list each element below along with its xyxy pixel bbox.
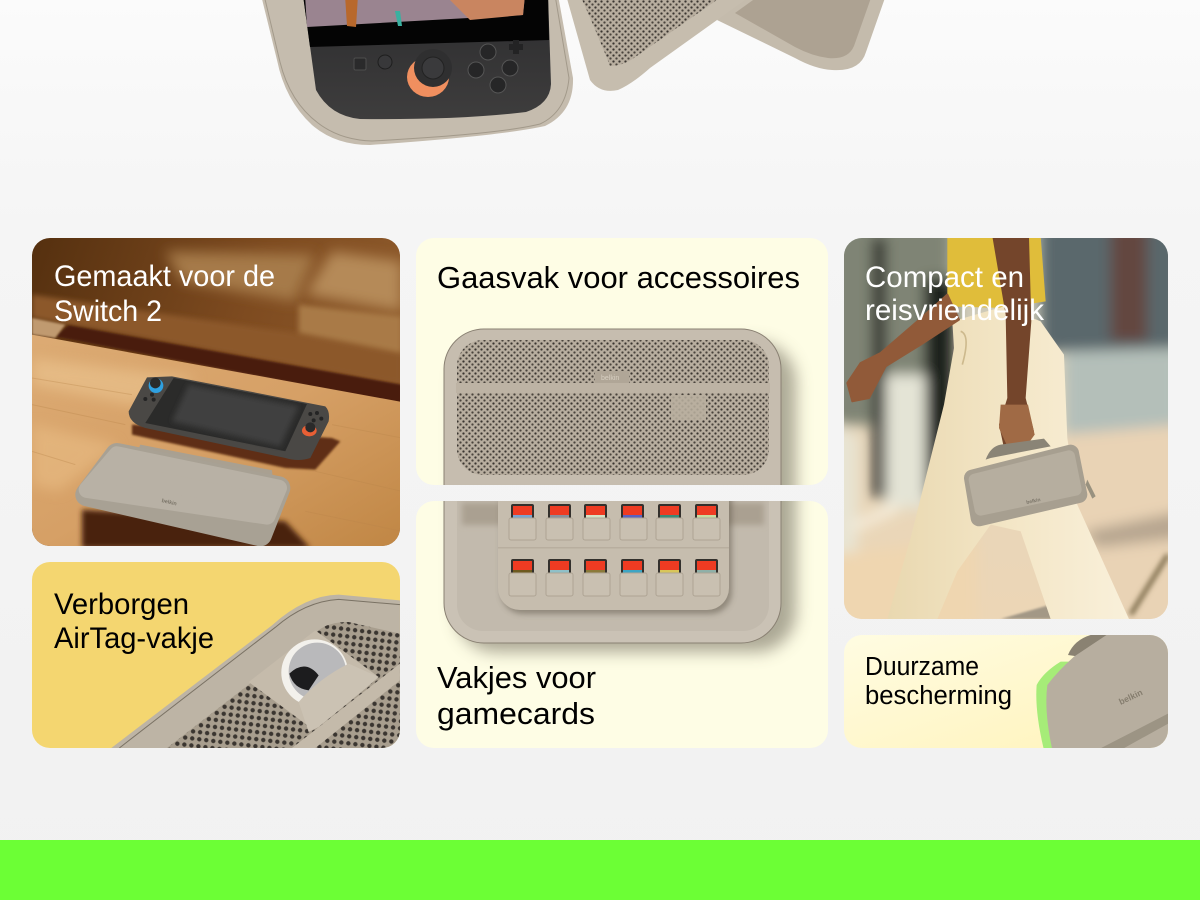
product image: open case with console (261, 0, 886, 145)
heading: gamecards (437, 696, 595, 731)
shadow under console (132, 425, 340, 470)
handle (1068, 635, 1111, 657)
strap (292, 664, 400, 748)
case edge (111, 595, 400, 748)
case back shell (717, 0, 886, 70)
travel case (87, 455, 279, 535)
game screen (305, 0, 525, 27)
case body (261, 0, 573, 145)
heading (437, 660, 596, 731)
heading: reisvriendelijk (865, 294, 1044, 327)
shadow under case (82, 510, 310, 548)
console (129, 376, 329, 460)
photo: person carrying case (844, 238, 1168, 619)
heading: Compact en (865, 261, 1024, 294)
pants (917, 306, 1129, 619)
green footer bar (0, 840, 1200, 900)
case close-up: belkin (1117, 687, 1144, 707)
shadow stripe on pavement (1002, 605, 1050, 619)
pouch patch (249, 630, 379, 729)
case shadow (760, 333, 806, 485)
card pockets (509, 518, 720, 596)
photo: AirTag pocket (111, 595, 400, 748)
mesh (167, 622, 400, 748)
photo: table and console (32, 238, 402, 548)
case shadow (448, 501, 806, 662)
other arm (847, 295, 959, 401)
console (303, 0, 551, 119)
heading: AirTag-vakje (54, 622, 214, 655)
joystick (407, 57, 449, 97)
heading: bescherming (865, 682, 1012, 710)
arm with bag (992, 236, 1034, 448)
heading (865, 261, 1044, 327)
AirTag (281, 639, 348, 706)
action buttons (480, 44, 496, 60)
panel: Gaasvak voor accessoires (416, 238, 828, 485)
zipper pull (139, 445, 273, 477)
mesh lid (444, 328, 782, 485)
system buttons (354, 58, 366, 70)
panel: Verborgen AirTag-vakje (32, 562, 400, 748)
heading: Verborgen (54, 588, 189, 621)
heading: Vakjes voor (437, 660, 596, 695)
panel: Vakjes voor gamecards (416, 501, 828, 748)
card holder panel (498, 501, 735, 617)
photo: person carrying case: belkin (1026, 497, 1041, 506)
pouch flap (299, 664, 379, 732)
panel: Duurzame bescherming (844, 633, 1171, 750)
heading: Duurzame (865, 653, 979, 681)
heading (55, 264, 274, 322)
green protection edge (1036, 662, 1074, 750)
game cards row 1 (511, 504, 718, 518)
mesh lid (566, 0, 752, 91)
heading: Gaasvak voor accessoires (437, 260, 800, 295)
photo: table and console: belkin (161, 498, 177, 507)
yellow top (947, 236, 1046, 308)
carried case (986, 439, 1051, 460)
heading: Switch 2 (54, 295, 162, 328)
heading: Gemaakt voor de (54, 260, 275, 293)
panel: Gemaakt voor de Switch 2 (32, 238, 402, 548)
case body (1046, 633, 1171, 750)
blurred street background (844, 238, 1168, 619)
game cards row 2 (511, 559, 718, 573)
mesh lid: belkin (601, 375, 619, 382)
heading (54, 588, 214, 655)
case tray (444, 501, 782, 644)
panel: Compact en reisvriendelijk (844, 238, 1168, 619)
heading (865, 653, 1012, 710)
case close-up (1036, 633, 1171, 750)
